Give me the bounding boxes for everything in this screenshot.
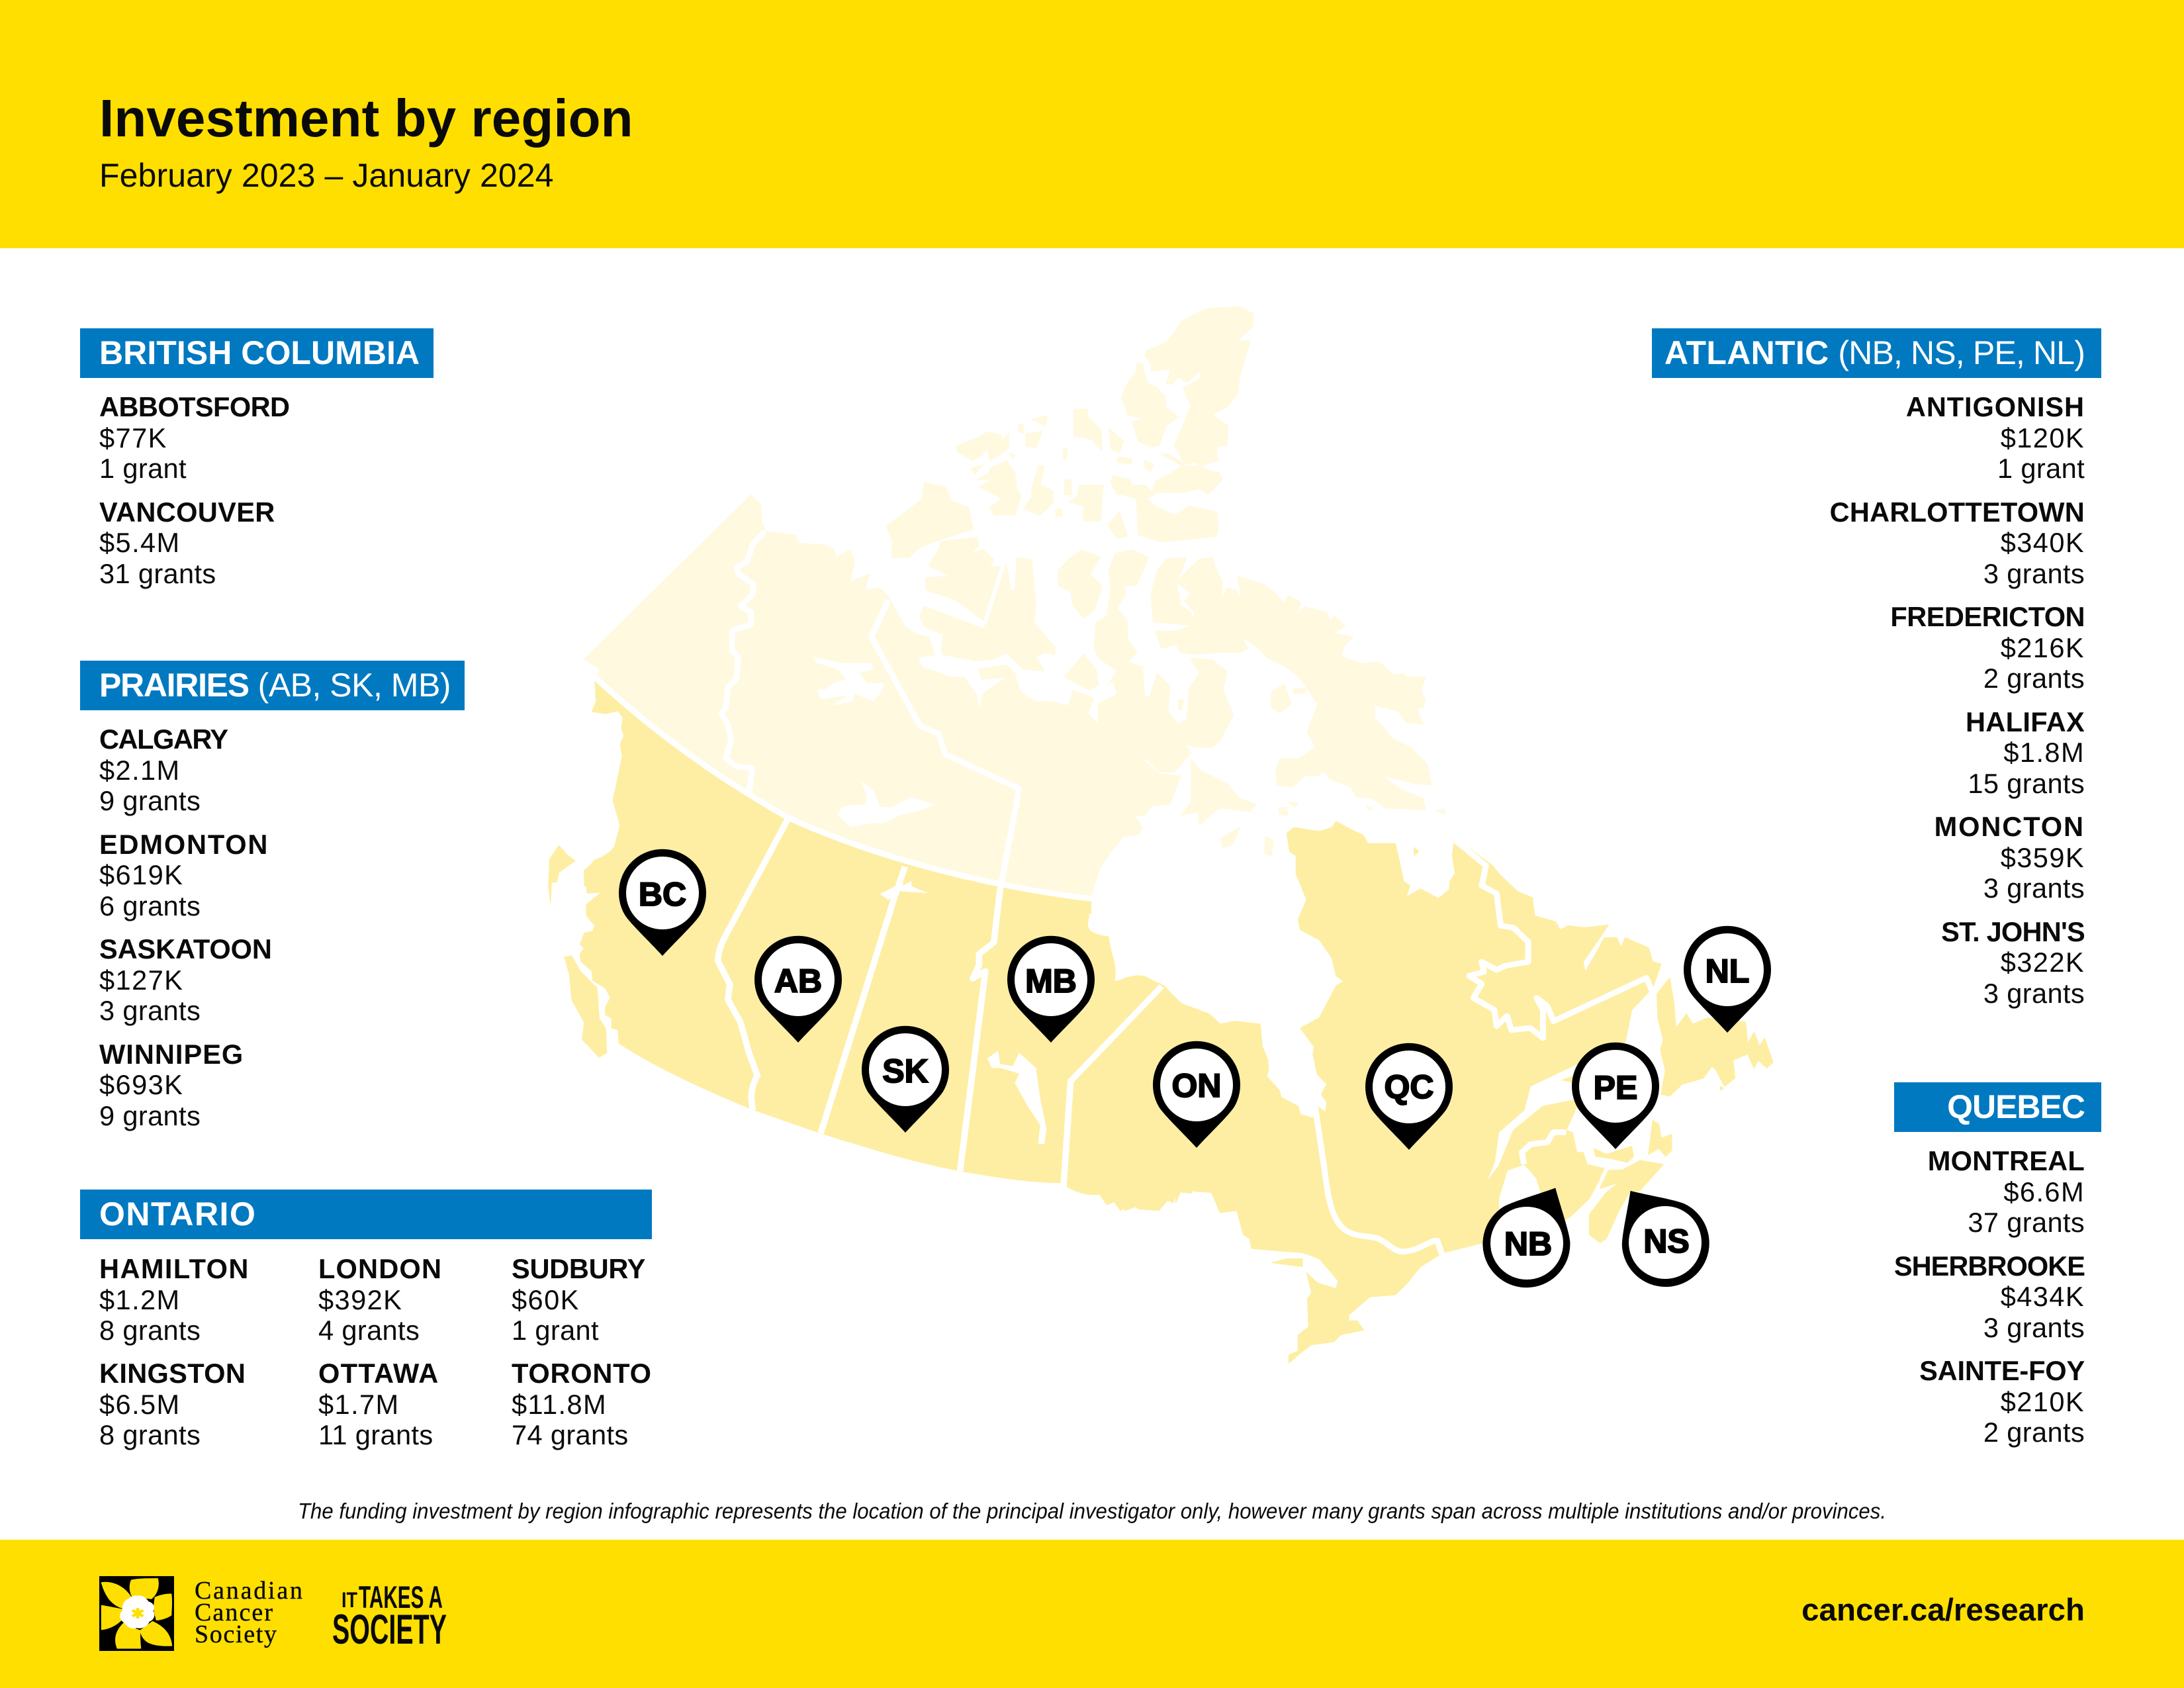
London: LONDON bbox=[318, 1253, 442, 1284]
pin: NS bbox=[1594, 1166, 1726, 1304]
Abbotsford: $77K bbox=[99, 422, 167, 453]
Sherbrooke: SHERBROOKE bbox=[1894, 1250, 2085, 1282]
Calgary bbox=[99, 724, 228, 816]
pin: QC bbox=[1365, 1043, 1453, 1150]
Nova Scotia bbox=[1590, 1160, 1663, 1243]
Hamilton: $1.2M bbox=[99, 1284, 181, 1315]
Fredericton: FREDERICTON bbox=[1890, 601, 2085, 632]
heading: Ontario: ONTARIO bbox=[99, 1196, 256, 1233]
Sainte-Foy: SAINTE-FOY bbox=[1919, 1355, 2085, 1386]
Hamilton: 8 grants bbox=[99, 1315, 201, 1346]
Montreal: 37 grants bbox=[1968, 1207, 2085, 1238]
panel: British Columbia bbox=[80, 328, 433, 589]
logo: It takes a society: IT bbox=[341, 1588, 357, 1612]
Edmonton bbox=[99, 829, 269, 921]
pin: ON bbox=[1153, 1041, 1240, 1148]
pin: SK bbox=[862, 1026, 949, 1133]
London bbox=[318, 1253, 442, 1346]
pin: ON: ON bbox=[1171, 1067, 1222, 1104]
Ottawa: $1.7M bbox=[318, 1389, 400, 1419]
Winnipeg: $693K bbox=[99, 1069, 183, 1100]
pin: NL: NL bbox=[1706, 953, 1749, 990]
Edmonton: 6 grants bbox=[99, 890, 201, 921]
Toronto: 74 grants bbox=[512, 1419, 629, 1450]
pin: PE: PE bbox=[1594, 1069, 1637, 1106]
footer band bbox=[0, 1540, 2184, 1688]
website: cancer.ca/research bbox=[1801, 1593, 2085, 1628]
Moncton bbox=[1934, 811, 2085, 904]
pin: BC: BC bbox=[639, 876, 686, 913]
Abbotsford: ABBOTSFORD bbox=[99, 391, 289, 422]
pin: BC bbox=[619, 849, 706, 956]
pin: NB: NB bbox=[1504, 1225, 1552, 1262]
Halifax: HALIFAX bbox=[1966, 706, 2085, 737]
southern provinces bbox=[549, 679, 1773, 1363]
header band bbox=[0, 0, 2184, 248]
Halifax: 15 grants bbox=[1968, 768, 2085, 798]
panel: Ontario bbox=[80, 1190, 652, 1450]
Fredericton bbox=[1890, 601, 2085, 694]
Montreal: MONTREAL bbox=[1928, 1145, 2085, 1176]
northern territories bbox=[584, 306, 1445, 898]
London: 4 grants bbox=[318, 1315, 420, 1346]
Sherbrooke: 3 grants bbox=[1983, 1312, 2085, 1342]
pin: AB: AB bbox=[774, 962, 822, 1000]
heading: Prairies bbox=[80, 661, 465, 710]
pin: QC: QC bbox=[1385, 1068, 1433, 1105]
Kingston: KINGSTON bbox=[99, 1358, 246, 1389]
heading: Atlantic bbox=[1652, 328, 2101, 378]
Abbotsford: 1 grant bbox=[99, 453, 187, 484]
heading: Atlantic: ATLANTIC (NB, NS, PE, NL) bbox=[1664, 334, 2085, 371]
heading: Prairies: PRAIRIES (AB, SK, MB) bbox=[99, 667, 451, 704]
pin: MB: MB bbox=[1025, 962, 1077, 1000]
Sudbury: SUDBURY bbox=[512, 1253, 645, 1284]
borders bbox=[595, 532, 1653, 1254]
Moncton: $359K bbox=[2001, 842, 2085, 872]
Sudbury: $60K bbox=[512, 1284, 580, 1315]
Antigonish bbox=[1906, 391, 2085, 484]
islands: PEI, Cape Breton, Anticosti, Manitoulin bbox=[1272, 1076, 1672, 1267]
pin: AB bbox=[754, 936, 842, 1043]
St. John's bbox=[1941, 916, 2085, 1009]
Ottawa: OTTAWA bbox=[318, 1358, 439, 1389]
Saskatoon: $127K bbox=[99, 964, 183, 996]
Saskatoon: 3 grants bbox=[99, 995, 201, 1026]
heading: Ontario bbox=[80, 1190, 652, 1239]
island: Haida Gwaii bbox=[549, 845, 575, 903]
pin: MB bbox=[1007, 936, 1095, 1043]
Charlottetown: 3 grants bbox=[1983, 557, 2085, 589]
Moncton: MONCTON bbox=[1934, 811, 2085, 842]
island: Vancouver Island bbox=[565, 956, 607, 1057]
Toronto: $11.8M bbox=[512, 1389, 607, 1419]
Calgary: 9 grants bbox=[99, 785, 201, 816]
island: Newfoundland bbox=[1657, 978, 1773, 1096]
lakes and inland water bbox=[813, 657, 1046, 1144]
panel: Prairies bbox=[80, 661, 465, 1131]
Toronto bbox=[512, 1358, 652, 1450]
Vancouver: 31 grants bbox=[99, 557, 216, 589]
London: $392K bbox=[318, 1284, 402, 1315]
Kingston: 8 grants bbox=[99, 1419, 201, 1450]
Winnipeg: 9 grants bbox=[99, 1100, 201, 1131]
wordmark bbox=[195, 1577, 302, 1648]
Sherbrooke bbox=[1894, 1250, 2085, 1342]
Kingston: $6.5M bbox=[99, 1389, 181, 1419]
Sainte-Foy: $210K bbox=[2001, 1386, 2085, 1417]
Sudbury: 1 grant bbox=[512, 1315, 599, 1346]
Hamilton bbox=[99, 1253, 250, 1346]
Antigonish: ANTIGONISH bbox=[1906, 391, 2085, 422]
panel: Quebec bbox=[1894, 1082, 2101, 1448]
pin: SK: SK bbox=[882, 1053, 929, 1090]
St. John's: ST. JOHN'S bbox=[1941, 916, 2085, 947]
Charlottetown: $340K bbox=[2001, 527, 2085, 558]
St. John's: 3 grants bbox=[1983, 977, 2085, 1009]
logo: It takes a society bbox=[332, 1579, 447, 1648]
Antigonish: 1 grant bbox=[1997, 453, 2085, 484]
pin: NS: NS bbox=[1643, 1223, 1690, 1260]
Montreal bbox=[1928, 1145, 2085, 1238]
Calgary: CALGARY bbox=[99, 724, 228, 755]
wordmark: Canadian bbox=[195, 1577, 302, 1605]
Kingston bbox=[99, 1358, 246, 1450]
Ottawa bbox=[318, 1358, 439, 1450]
Montreal: $6.6M bbox=[2003, 1176, 2085, 1207]
Charlottetown bbox=[1830, 496, 2085, 589]
heading: Quebec bbox=[1894, 1082, 2101, 1132]
Fredericton: $216K bbox=[2001, 632, 2085, 663]
heading: Quebec: QUEBEC bbox=[1947, 1088, 2085, 1125]
Vancouver bbox=[99, 496, 275, 589]
Sainte-Foy bbox=[1919, 1355, 2085, 1448]
Abbotsford bbox=[99, 391, 289, 484]
panel: Atlantic bbox=[1652, 328, 2101, 1009]
pin: PE bbox=[1572, 1043, 1659, 1149]
Toronto: TORONTO bbox=[512, 1358, 652, 1389]
heading: British Columbia bbox=[80, 328, 433, 378]
Ottawa: 11 grants bbox=[318, 1419, 433, 1450]
Charlottetown: CHARLOTTETOWN bbox=[1830, 496, 2085, 527]
Edmonton: EDMONTON bbox=[99, 829, 269, 859]
Winnipeg bbox=[99, 1038, 244, 1131]
St. John's: $322K bbox=[2001, 947, 2085, 978]
wordmark: Society bbox=[195, 1620, 277, 1648]
Saskatoon: SASKATOON bbox=[99, 933, 272, 964]
wordmark: Cancer bbox=[195, 1599, 273, 1626]
Halifax: $1.8M bbox=[2003, 737, 2085, 768]
heading: British Columbia: BRITISH COLUMBIA bbox=[99, 334, 420, 371]
Saskatoon bbox=[99, 933, 272, 1026]
Calgary: $2.1M bbox=[99, 755, 181, 785]
logo: Canadian Cancer Society bbox=[99, 1576, 302, 1651]
subtitle: February 2023 – January 2024 bbox=[99, 157, 554, 194]
Fredericton: 2 grants bbox=[1983, 663, 2085, 694]
Antigonish: $120K bbox=[2001, 422, 2085, 453]
pin: NB bbox=[1467, 1168, 1594, 1303]
Edmonton: $619K bbox=[99, 859, 183, 890]
Sainte-Foy: 2 grants bbox=[1983, 1417, 2085, 1448]
Vancouver: VANCOUVER bbox=[99, 496, 275, 527]
title: Investment by region bbox=[99, 89, 633, 148]
pin: NL bbox=[1684, 926, 1771, 1033]
daffodil mark bbox=[99, 1576, 174, 1651]
Hamilton: HAMILTON bbox=[99, 1253, 250, 1284]
Moncton: 3 grants bbox=[1983, 872, 2085, 904]
Sherbrooke: $434K bbox=[2001, 1281, 2085, 1312]
Halifax bbox=[1966, 706, 2085, 798]
Vancouver: $5.4M bbox=[99, 527, 181, 558]
Sudbury bbox=[512, 1253, 645, 1346]
Winnipeg: WINNIPEG bbox=[99, 1038, 244, 1070]
